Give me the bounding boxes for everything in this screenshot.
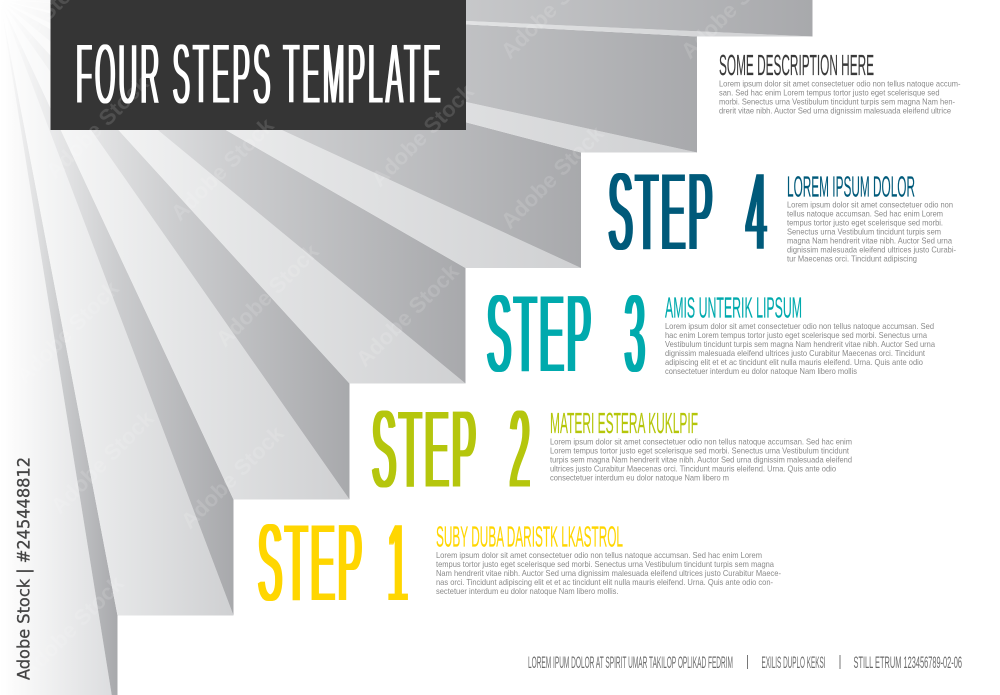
watermark pattern: Adobe Stock: [46, 405, 159, 519]
step 3 body: Lorem ipsum dolor sit amet consectetuer odio non tellus natoque accumsan. Sed: [665, 321, 934, 331]
step 1 body: sectetuer interdum eu dolor natoque Nam libero mollis.: [436, 586, 618, 596]
intro text block: morbi. Senectus urna Vestibulum tincidunt turpis sem magna Nam hen-: [719, 96, 955, 106]
footer: EXILIS DUPLO KEKSI: [762, 653, 826, 672]
watermark pattern: Adobe Stock: [211, 238, 324, 352]
step 3 body: Vestibulum tincidunt turpis sem magna Nam hendrerit vitae nibh. Auctor Sed urna: [665, 339, 935, 349]
watermark pattern: [0, 0, 789, 684]
step 4 body: tur Maecenas orci. Tincidunt adipiscing: [787, 254, 917, 264]
watermark pattern: Adobe Stock: [16, 570, 129, 684]
intro text block: Lorem ipsum dolor sit amet consectetuer odio non tellus natoque accum-: [719, 78, 961, 88]
watermark pattern: Adobe Stock: [11, 275, 124, 389]
step 1 body: Lorem ipsum dolor sit amet consectetuer odio non tellus natoque accumsan. Sed hac enim Lorem: [436, 550, 762, 560]
step 2: [372, 388, 852, 512]
step 2 label: STEP 2: [372, 388, 533, 512]
step 3 label: STEP 3: [487, 272, 648, 396]
intro text block: [719, 50, 961, 115]
step 1 body: Nam hendrerit vitae nibh. Auctor Sed urna dignissim malesuada eleifend ultrices justo Curabitur Maece-: [436, 568, 781, 578]
stock id label: Adobe Stock | #245448812: [14, 457, 34, 680]
step 1 body: [436, 550, 781, 596]
title banner: [50, 0, 466, 130]
step 3 body: adipiscing elit et et ac tincidunt elit nulla mauris eleifend. Urna. Quis ante odio: [665, 357, 923, 367]
step 4 body: Lorem ipsum dolor sit amet consectetuer odio non: [787, 200, 953, 210]
step 3: [487, 272, 935, 396]
step 2: MATERI ESTERA KUKLPIF: [550, 408, 698, 440]
step 3 body: hac enim Lorem tempus tortor justo eget scelerisque sed morbi. Senectus urna: [665, 330, 927, 340]
step 2 body: Lorem tempus tortor justo eget scelerisque sed morbi. Senectus urna Vestibulum tincidunt: [550, 446, 850, 456]
step 1: [258, 501, 781, 625]
watermark pattern: Adobe Stock: [366, 78, 479, 192]
step 4 body: [787, 200, 956, 264]
watermark pattern: Adobe Stock: [176, 420, 289, 534]
step 1: SUBY DUBA DARISTK LKASTROL: [436, 522, 623, 554]
step 4 body: tellus natoque accumsan. Sed hac enim Lorem: [787, 209, 943, 219]
step 1 label: STEP 1: [258, 501, 411, 625]
watermark pattern: Adobe Stock: [41, 70, 154, 184]
step 2 body: Lorem ipsum dolor sit amet consectetuer odio non tellus natoque accumsan. Sed hac enim: [550, 437, 852, 447]
step 3 body: dignissim malesuada eleifend ultrices justo Curabitur Maecenas orci. Tincidunt: [665, 348, 926, 358]
step 4 label: STEP 4: [608, 150, 770, 274]
title: FOUR STEPS TEMPLATE: [76, 26, 444, 122]
step 2 body: consectetuer interdum eu dolor natoque Nam libero m: [550, 472, 729, 482]
intro text block: drerit vitae nibh. Auctor Sed urna dignissim malesuada eleifend ultrice: [719, 105, 951, 115]
step 2 body: [550, 437, 852, 482]
step 4 body: magna Nam hendrerit vitae nibh. Auctor Sed urna: [787, 236, 952, 246]
step 3 body: [665, 321, 935, 376]
step 3: AMIS UNTERIK LIPSUM: [665, 292, 802, 324]
watermark pattern: Adobe Stock: [496, 120, 609, 234]
intro text block: san. Sed hac enim Lorem tempus tortor justo eget scelerisque sed: [719, 87, 940, 97]
step 4: [608, 150, 956, 274]
step 3 body: consectetuer interdum eu dolor natoque Nam libero mollis: [665, 366, 857, 376]
step 4 body: Senectus urna Vestibulum tincidunt turpis sem: [787, 227, 941, 237]
step 1 body: nas orci. Tincidunt adipiscing elit et et ac tincidunt elit nulla mauris eleifend. Urna. Quis ante odio con-: [436, 577, 773, 587]
watermark pattern: Adobe Stock: [351, 258, 464, 372]
step 4 body: tempus tortor justo eget scelerisque sed morbi.: [787, 218, 943, 228]
watermark pattern: Adobe Stock: [166, 112, 279, 226]
step 1 body: tempus tortor justo eget scelerisque sed morbi. Senectus urna Vestibulum tincidunt turpis sem magna: [436, 559, 774, 569]
step 2 body: ultrices justo Curabitur Maecenas orci. Tincidunt mauris eleifend. Urna. Quis ante odio: [550, 464, 836, 474]
step 4 body: dignissim malesuada eleifend ultrices justo Curabi-: [787, 245, 956, 255]
step 2 body: turpis sem magna Nam hendrerit vitae nibh. Auctor Sed urna dignissim malesuada eleifend: [550, 455, 852, 465]
